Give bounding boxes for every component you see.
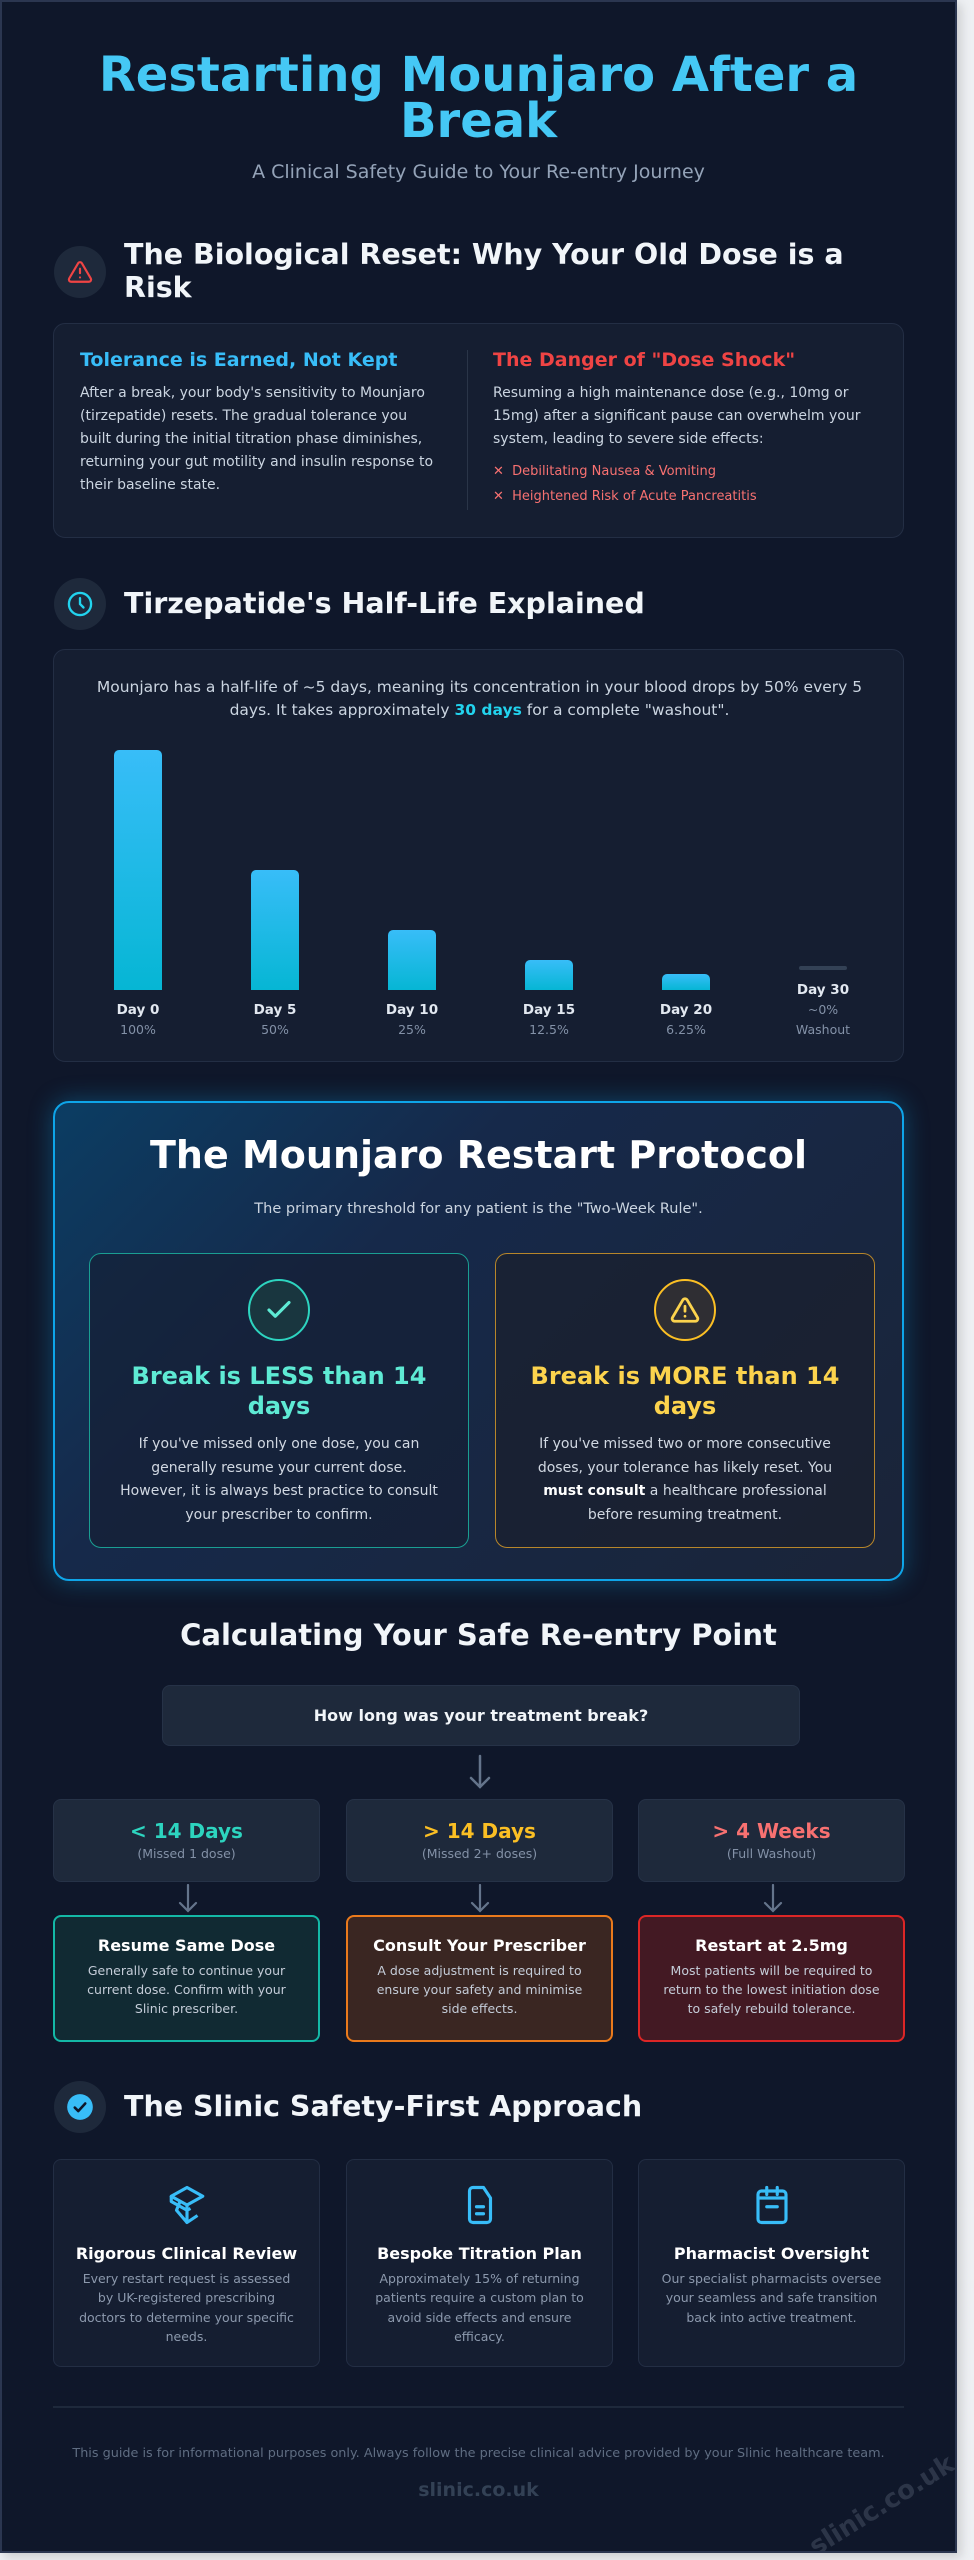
bar chart: Day 10 <box>386 1002 438 1018</box>
option: less than 14 days <box>53 1799 320 1882</box>
right column: dose shock: The Danger of "Dose Shock" <box>493 349 795 371</box>
heading: safety-first: The Slinic Safety-First Approach <box>124 2090 642 2123</box>
bar chart: Day 0 <box>117 1002 159 1018</box>
right column: dose shock: ✕ Debilitating Nausea & Vomiting <box>493 464 716 479</box>
option: more than 14 days: (Missed 2+ doses) <box>422 1846 537 1861</box>
bar chart: ~0% <box>808 1002 838 1017</box>
result: resume same dose <box>53 1915 320 2042</box>
card: clinical review <box>53 2159 320 2367</box>
option: more than 4 weeks: (Full Washout) <box>727 1846 816 1861</box>
question box <box>162 1685 800 1746</box>
card: pharmacist oversight: Pharmacist Oversight <box>674 2244 869 2263</box>
title: Break <box>400 93 557 149</box>
bar chart <box>114 750 850 1037</box>
right column: dose shock: ✕ Heightened Risk of Acute Pancreatitis <box>493 489 757 504</box>
card: pharmacist oversight <box>638 2159 905 2367</box>
arrow: main <box>470 1754 490 1789</box>
option: more than 4 weeks: > 4 Weeks <box>712 1819 831 1843</box>
card: titration plan: Bespoke Titration Plan <box>377 2244 582 2263</box>
result: resume same dose: Generally safe to continue your current dose. Confirm with your Slinic prescriber. <box>87 1963 286 2016</box>
icon: check badge <box>54 2081 106 2133</box>
result: consult prescriber: A dose adjustment is required to ensure your safety and minimise side effects. <box>377 1963 582 2016</box>
card: more than 14 days: doses, your tolerance has likely reset. You <box>538 1460 832 1476</box>
question box: How long was your treatment break? <box>314 1706 648 1725</box>
panel: restart protocol <box>53 1101 904 1581</box>
option: more than 4 weeks <box>638 1799 905 1882</box>
icon: warning yellow <box>654 1279 716 1341</box>
panel: half-life chart <box>53 649 904 1062</box>
card: less than 14 days: However, it is always best practice to consult your prescriber to confirm. <box>120 1483 438 1522</box>
result: restart at 2.5mg <box>638 1915 905 2042</box>
option: more than 14 days <box>346 1799 613 1882</box>
bar chart: Washout <box>796 1022 850 1037</box>
result: restart at 2.5mg: Restart at 2.5mg <box>695 1936 848 1955</box>
icon: cube <box>170 2186 204 2224</box>
card: more than 14 days <box>495 1253 875 1548</box>
title <box>99 47 858 149</box>
bar chart: 100% <box>120 1022 156 1037</box>
icon: document <box>468 2186 492 2224</box>
card: more than 14 days: Break is MORE than 14 days <box>531 1362 839 1420</box>
footer brand: slinic.co.uk <box>418 2479 539 2501</box>
card: more than 14 days: before resuming treatment. <box>588 1506 782 1522</box>
panel: biological reset <box>53 323 904 538</box>
card: less than 14 days <box>89 1253 469 1548</box>
protocol subtitle: The primary threshold for any patient is the "Two-Week Rule". <box>254 1201 703 1217</box>
bar chart: 50% <box>261 1022 289 1037</box>
protocol title: The Mounjaro Restart Protocol <box>150 1133 807 1177</box>
card: clinical review: Every restart request is assessed by UK-registered prescribing doctors to determine your specific needs. <box>79 2271 294 2344</box>
heading: biological reset <box>124 238 844 304</box>
heading: biological reset: The Biological Reset: Why Your Old Dose is a <box>124 238 844 271</box>
heading: half-life: Tirzepatide's Half-Life Explained <box>124 587 645 620</box>
heading: biological reset: Risk <box>124 271 192 304</box>
icon: calendar <box>756 2186 788 2224</box>
left column: tolerance: After a break, your body's sensitivity to Mounjaro (tirzepatide) resets. The gradual tolerance you built during the initial titration phase diminishes, returning your gut motility and insulin response to their baseline state. <box>80 385 433 493</box>
card: more than 14 days: If you've missed two or more consecutive <box>539 1436 831 1452</box>
bar chart: 6.25% <box>666 1022 706 1037</box>
option: more than 14 days: > 14 Days <box>423 1819 536 1843</box>
card: more than 14 days: must consult a healthcare professional <box>543 1483 827 1499</box>
description: Mounjaro has a half-life of ~5 days, meaning its concentration in your blood drops by 50% every 5 days. It takes approximately 30 days for a complete "washout". <box>97 678 862 719</box>
heading: calculating: Calculating Your Safe Re-entry Point <box>180 1618 777 1652</box>
option: less than 14 days: (Missed 1 dose) <box>137 1846 236 1861</box>
result: restart at 2.5mg: Most patients will be required to return to the lowest initiation dose to safely rebuild tolerance. <box>663 1963 880 2016</box>
card: less than 14 days: generally resume your current dose. <box>151 1460 407 1476</box>
subtitle: A Clinical Safety Guide to Your Re-entry Journey <box>252 161 705 183</box>
card: clinical review: Rigorous Clinical Review <box>76 2244 297 2263</box>
left column: tolerance: Tolerance is Earned, Not Kept <box>80 349 397 371</box>
result: resume same dose: Resume Same Dose <box>98 1936 275 1955</box>
option: less than 14 days: < 14 Days <box>130 1819 243 1843</box>
card: less than 14 days: Break is LESS than 14 days <box>132 1362 426 1420</box>
result: consult prescriber <box>346 1915 613 2042</box>
right column: dose shock: Resuming a high maintenance dose (e.g., 10mg or 15mg) after a significant pause can overwhelm your system, leading to severe side effects: <box>493 385 860 447</box>
icon: clock <box>54 578 106 630</box>
bar chart: Day 5 <box>254 1002 296 1018</box>
card: titration plan <box>346 2159 613 2367</box>
bar chart: Day 15 <box>523 1002 575 1018</box>
footer disclaimer: This guide is for informational purposes only. Always follow the precise clinical advice provided by your Slinic healthcare team. <box>72 2446 885 2461</box>
card: pharmacist oversight: Our specialist pharmacists oversee your seamless and safe transition back into active treatment. <box>662 2271 881 2325</box>
bar chart: 25% <box>398 1022 426 1037</box>
bar chart: 12.5% <box>529 1022 569 1037</box>
card: less than 14 days: If you've missed only one dose, you can <box>139 1436 419 1452</box>
card: titration plan: Approximately 15% of returning patients require a custom plan to avoid side effects and ensure efficacy. <box>375 2271 584 2344</box>
bar chart: Day 20 <box>660 1002 712 1018</box>
right column: dose shock <box>493 349 860 504</box>
arrows: small <box>178 1884 782 1912</box>
icon: check <box>248 1279 310 1341</box>
title: Restarting Mounjaro After a <box>99 47 858 103</box>
result: consult prescriber: Consult Your Prescriber <box>373 1936 586 1955</box>
icon: warning <box>54 246 106 298</box>
bar chart: Day 30 <box>797 982 849 998</box>
